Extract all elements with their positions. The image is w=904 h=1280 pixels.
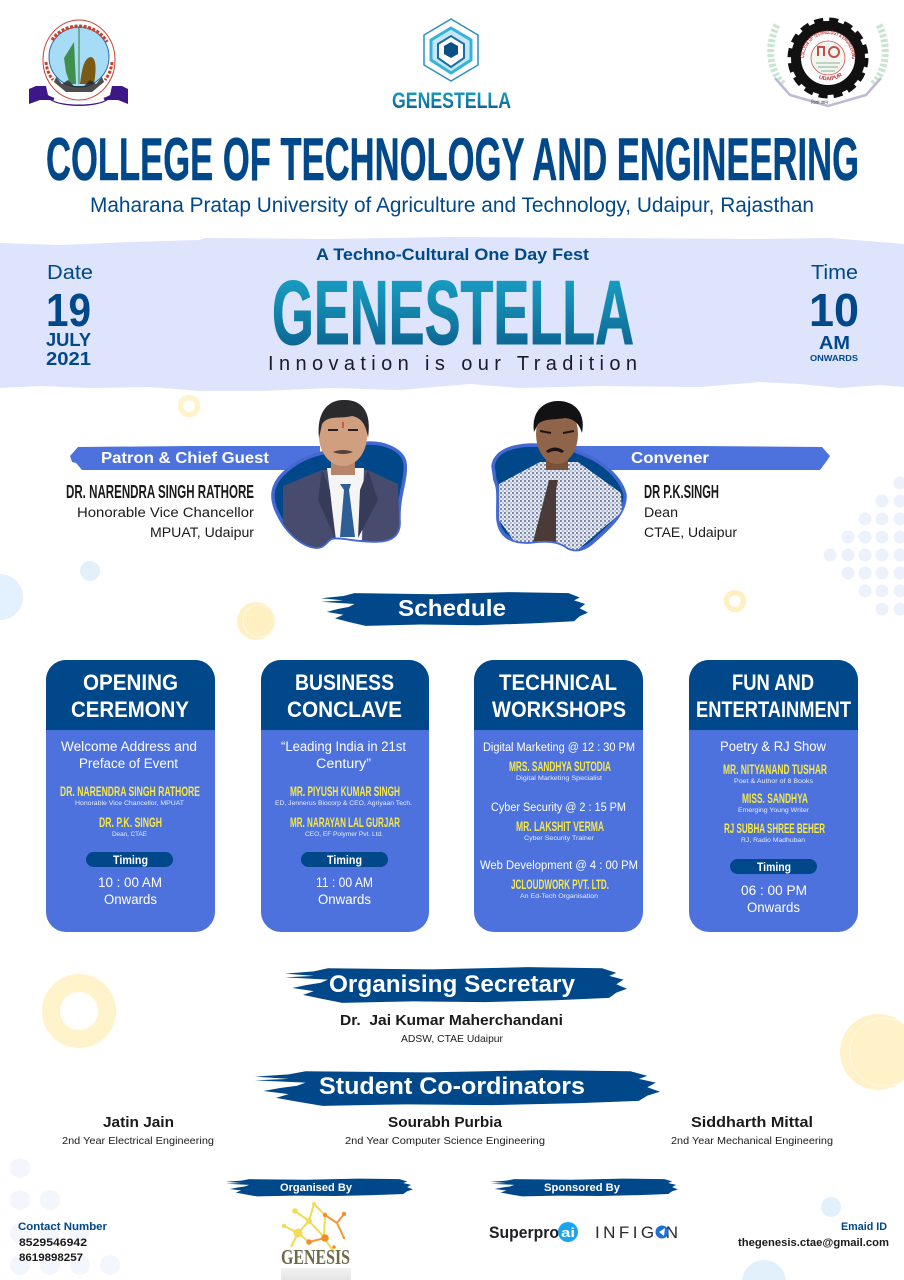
speakers: MR. PIYUSH KUMAR SINGH — [290, 784, 400, 799]
speakers — [275, 784, 412, 838]
panel: patron and chief guest — [66, 400, 405, 550]
speakers: DR. P.K. SINGH — [99, 815, 162, 830]
performers: RJ SUBHA SHREE BEHER — [724, 821, 825, 836]
workshop: cyber security: MR. LAKSHIT VERMA — [516, 819, 604, 834]
panel: business conclave — [261, 660, 429, 932]
convener portrait — [493, 401, 625, 552]
card heading: TECHNICAL — [499, 670, 617, 695]
logo: Genesis — [281, 1202, 351, 1280]
card heading: CEREMONY — [71, 697, 189, 722]
card heading — [287, 670, 402, 722]
timing — [730, 859, 817, 915]
contact number — [18, 1221, 108, 1264]
speakers: MR. NARAYAN LAL GURJAR — [290, 815, 400, 830]
convener ribbon — [575, 446, 830, 470]
heading: student co-ordinators — [255, 1070, 660, 1106]
logo: Infigon: INFIG N — [595, 1223, 678, 1242]
email — [738, 1221, 889, 1249]
card description — [281, 739, 406, 771]
panel: technical workshops — [474, 660, 643, 932]
timing: 06 : 00 PM — [741, 883, 807, 898]
fest tagline: A Techno-Cultural One Day Fest — [316, 246, 590, 264]
heading: organising secretary — [285, 967, 627, 1003]
heading: sponsored by — [491, 1179, 678, 1196]
time block: Time — [811, 261, 858, 284]
timing: 11 : 00 AM — [316, 875, 373, 890]
background decorations — [0, 398, 904, 1280]
patron ribbon — [70, 446, 320, 470]
logo: Superpro ai: Superpro — [489, 1223, 559, 1242]
speakers: DR. NARENDRA SINGH RATHORE — [60, 784, 200, 799]
workshop: digital marketing: MRS. SANDHYA SUTODIA — [509, 759, 611, 774]
card description: Preface of Event — [79, 756, 178, 771]
performers — [723, 762, 827, 844]
logo: college gear emblem: UDAIPUR — [819, 73, 842, 80]
date block — [46, 261, 93, 369]
workshop: web development — [480, 860, 638, 900]
performers: MR. NITYANAND TUSHAR — [723, 762, 827, 777]
speakers: CEO, EF Polymer Pvt. Ltd. — [305, 831, 383, 838]
card heading: ENTERTAINMENT — [696, 697, 851, 722]
card heading — [696, 670, 851, 722]
panel: convener — [493, 401, 830, 552]
logo: Genesis: GENESIS — [281, 1245, 350, 1269]
logo: college gear emblem: विद्या ज्ञान — [811, 99, 828, 106]
timing: Onwards — [318, 892, 371, 907]
patron portrait — [273, 400, 405, 550]
logo: university crest — [29, 20, 128, 106]
time block: ONWARDS — [810, 353, 858, 363]
patron name: DR. NARENDRA SINGH RATHORE — [66, 482, 254, 502]
patron role: MPUAT, Udaipur — [150, 525, 255, 540]
card description: Welcome Address and — [61, 739, 197, 754]
timing: Timing — [327, 855, 362, 867]
patron role — [77, 505, 255, 540]
email: Emaid ID — [841, 1221, 887, 1233]
contact number: 8619898257 — [19, 1252, 83, 1264]
convener role — [644, 505, 738, 540]
workshop: web development: An Ed-Tech Organisation — [520, 893, 598, 900]
patron role: Honorable Vice Chancellor — [77, 505, 255, 520]
time block — [809, 261, 859, 363]
card heading: CONCLAVE — [287, 697, 402, 722]
card heading: FUN AND — [732, 670, 814, 695]
motto: Innovation is our Tradition — [268, 353, 637, 375]
card description: Poetry & RJ Show — [720, 739, 826, 754]
workshop: cyber security — [491, 802, 626, 842]
performers: MISS. SANDHYA — [742, 791, 808, 806]
logo: Genestella — [392, 19, 511, 113]
panel: opening ceremony — [46, 660, 215, 932]
performers: RJ, Radio Madhuban — [741, 837, 805, 844]
coordinator: Jatin Jain: Jatin Jain — [103, 1114, 174, 1131]
timing: Timing — [113, 855, 148, 867]
performers: Emerging Young Writer — [738, 807, 810, 814]
convener name: DR P.K.SINGH — [644, 482, 719, 502]
heading: schedule: Schedule — [398, 595, 506, 621]
heading: sponsored by: Sponsored By — [544, 1182, 621, 1194]
organising secretary details — [340, 1012, 563, 1045]
contact number: Contact Number — [18, 1221, 108, 1233]
contact number: 8529546942 — [19, 1237, 87, 1249]
date block: 2021 — [46, 349, 91, 369]
logo: college gear emblem — [767, 18, 889, 108]
coordinator: Siddharth Mittal — [671, 1114, 833, 1147]
speakers: ED, Jennerus Biocorp & CEO, Agriyaan Tech. — [275, 800, 412, 807]
timing: 10 : 00 AM — [98, 875, 162, 890]
workshop: digital marketing — [483, 742, 635, 782]
timing: Timing — [757, 862, 791, 874]
card heading — [492, 670, 626, 722]
email: thegenesis.ctae@gmail.com — [738, 1237, 889, 1249]
organising secretary details: ADSW, CTAE Udaipur — [401, 1033, 503, 1045]
patron ribbon: Patron & Chief Guest — [101, 450, 269, 467]
convener ribbon: Convener — [631, 450, 709, 467]
speakers: Honorable Vice Chancellor, MPUAT — [75, 800, 184, 807]
logo: Genestella: GENESTELLA — [392, 88, 511, 113]
date block: JULY — [46, 330, 91, 350]
workshop: digital marketing: Digital Marketing Specialist — [516, 775, 602, 782]
workshop: digital marketing: Digital Marketing @ 12 : 30 PM — [483, 742, 635, 754]
card heading — [71, 670, 189, 722]
card heading: BUSINESS — [295, 670, 394, 695]
convener role: Dean — [644, 505, 678, 520]
workshop: web development: JCLOUDWORK PVT. LTD. — [511, 877, 609, 892]
speakers: Dean, CTAE — [112, 831, 148, 838]
workshop: web development: Web Development @ 4 : 00 PM — [480, 860, 638, 872]
logo: college gear emblem: COLLEGE OF TECHNOLOGY & ENGINEERING — [800, 30, 856, 59]
subtitle: Maharana Pratap University of Agriculture and Technology, Udaipur, Rajasthan — [90, 194, 814, 217]
coordinator: Sourabh Purbia: 2nd Year Computer Science Engineering — [345, 1135, 545, 1147]
performers: Poet & Author of 8 Books — [734, 778, 814, 785]
coordinator: Sourabh Purbia — [345, 1114, 545, 1147]
timing: Onwards — [747, 900, 800, 915]
heading: schedule — [321, 592, 588, 626]
coordinator: Siddharth Mittal: 2nd Year Mechanical Engineering — [671, 1135, 833, 1147]
date block: Date — [47, 261, 93, 284]
heading: student co-ordinators: Student Co-ordinators — [319, 1073, 585, 1100]
heading: organised by: Organised By — [280, 1182, 353, 1194]
card heading: WORKSHOPS — [492, 697, 626, 722]
coordinator: Jatin Jain: 2nd Year Electrical Engineering — [62, 1135, 214, 1147]
convener role: CTAE, Udaipur — [644, 525, 738, 540]
card description: “Leading India in 21st — [281, 739, 406, 754]
organising secretary details: Dr. Jai Kumar Maherchandani — [340, 1012, 563, 1029]
timing — [86, 852, 173, 907]
coordinator: Siddharth Mittal: Siddharth Mittal — [691, 1114, 813, 1131]
timing — [301, 852, 388, 907]
event name: GENESTELLA — [272, 263, 634, 364]
logo: Superpro ai: ai — [561, 1225, 575, 1240]
time block: 10 — [809, 284, 859, 336]
heading: organised by — [226, 1179, 413, 1196]
timing: Onwards — [104, 892, 157, 907]
date block: 19 — [46, 284, 91, 336]
card description: Century” — [316, 756, 371, 771]
time block: AM — [819, 332, 850, 353]
heading: organising secretary: Organising Secretary — [329, 971, 576, 998]
speakers — [60, 784, 200, 838]
banner band — [0, 237, 904, 391]
panel: fun and entertainment — [689, 660, 858, 932]
card heading: OPENING — [83, 670, 178, 695]
workshop: cyber security: Cyber Security Trainer — [524, 835, 595, 842]
card description — [61, 739, 197, 771]
coordinator: Sourabh Purbia: Sourabh Purbia — [388, 1114, 503, 1131]
coordinator: Jatin Jain — [62, 1114, 214, 1147]
workshop: cyber security: Cyber Security @ 2 : 15 PM — [491, 802, 626, 814]
